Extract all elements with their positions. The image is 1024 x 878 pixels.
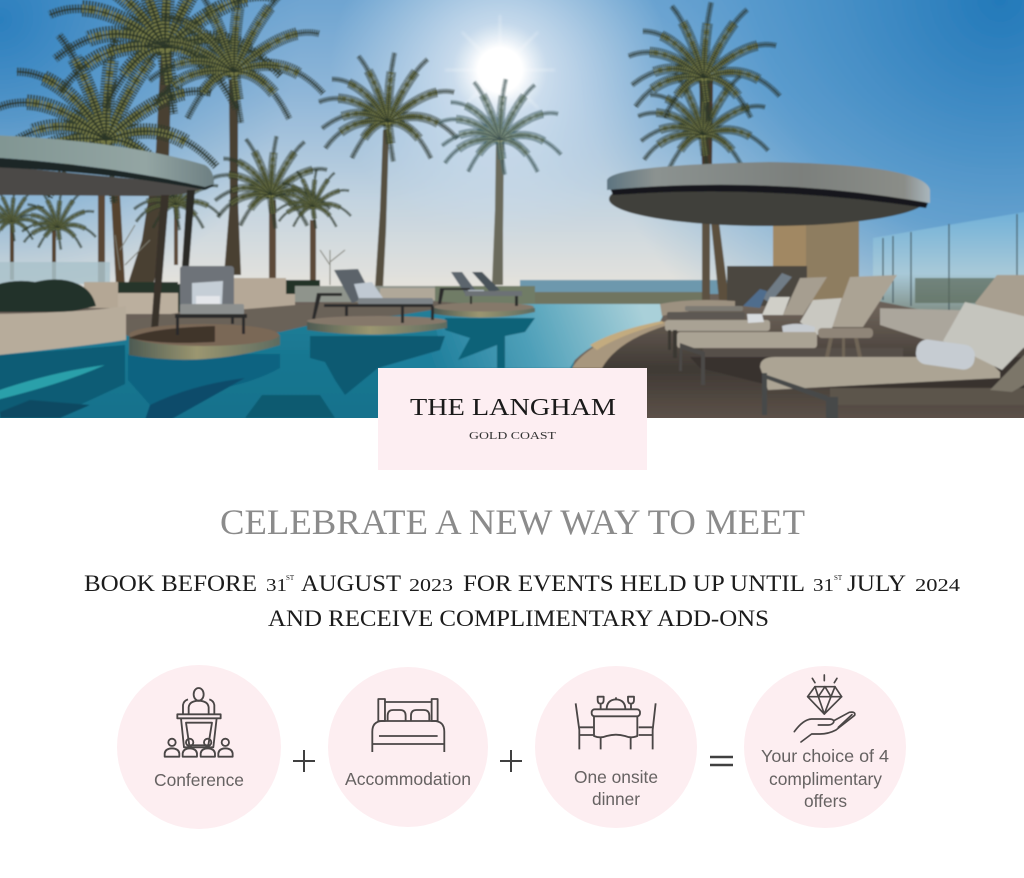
label: one onsite dinner: One onsite bbox=[574, 767, 658, 787]
lounger 1: foreground bbox=[760, 275, 1024, 420]
panel: accommodation bbox=[328, 667, 488, 827]
palm crowns bbox=[0, 0, 780, 250]
centre lounger bbox=[312, 269, 434, 323]
label: one onsite dinner: dinner bbox=[592, 789, 640, 809]
line two: AND RECEIVE COMPLIMENTARY ADD-ONS bbox=[268, 606, 769, 631]
sun flare bbox=[446, 16, 554, 106]
line one: ST bbox=[286, 574, 295, 582]
far loungers bbox=[438, 272, 522, 306]
rolled towel bbox=[914, 338, 976, 371]
logo panel bbox=[378, 368, 647, 470]
logo: gold coast: GOLD COAST bbox=[469, 431, 557, 442]
side table bbox=[818, 328, 873, 357]
line one: 31 bbox=[266, 575, 287, 595]
label: complimentary offers: complimentary bbox=[769, 769, 882, 789]
label: one onsite dinner bbox=[574, 767, 658, 809]
right round canopy bbox=[607, 162, 930, 226]
icon: bed bbox=[372, 699, 444, 752]
round platforms bbox=[129, 302, 535, 360]
pool loungers bbox=[175, 266, 522, 335]
foreground cushion bbox=[943, 302, 1024, 370]
pool water bbox=[0, 304, 668, 420]
label: conference: Conference bbox=[154, 770, 244, 790]
booking offer text bbox=[84, 571, 960, 631]
icon: dining table bbox=[576, 697, 656, 749]
line one: ST bbox=[834, 574, 843, 582]
label: complimentary offers: Your choice of 4 bbox=[761, 746, 889, 766]
lounger 3 bbox=[665, 277, 827, 358]
plus sign bbox=[293, 750, 315, 772]
lounger 2 bbox=[677, 275, 903, 385]
left canopy bbox=[0, 135, 214, 330]
panel: onsite dinner bbox=[535, 666, 697, 828]
glass balustrade bbox=[873, 210, 1024, 348]
lounger 4: blue back bbox=[667, 273, 792, 319]
sun lounger row bbox=[665, 273, 1024, 420]
small far pool rim bbox=[660, 300, 735, 316]
label: complimentary offers: offers bbox=[804, 791, 847, 811]
label: accommodation: Accommodation bbox=[345, 769, 471, 789]
plus sign bbox=[500, 750, 522, 772]
armchair lounger bbox=[175, 266, 247, 335]
right timber deck bbox=[570, 306, 1024, 420]
line one: 31 bbox=[813, 575, 834, 595]
line one: FOR EVENTS HELD UP UNTIL bbox=[463, 571, 805, 596]
right canopy column bbox=[726, 220, 860, 306]
panel: conference bbox=[117, 665, 281, 829]
line one: 2024 bbox=[915, 575, 960, 595]
hero photo: resort pool with palms bbox=[0, 0, 1024, 420]
icon: diamond in hand bbox=[794, 675, 855, 742]
pale tree bbox=[115, 225, 345, 285]
line one: JULY bbox=[847, 571, 906, 596]
sky bbox=[0, 0, 1024, 290]
icon: lectern and audience bbox=[165, 688, 233, 757]
equals sign bbox=[710, 757, 733, 765]
line one bbox=[84, 571, 960, 596]
heading: CELEBRATE A NEW WAY TO MEET bbox=[220, 502, 805, 542]
line one: BOOK BEFORE bbox=[84, 571, 257, 596]
sea and dune bbox=[520, 280, 740, 304]
palm trunks bbox=[10, 50, 729, 300]
ground base bbox=[0, 293, 917, 366]
left pool deck bbox=[127, 300, 470, 336]
label: complimentary offers bbox=[761, 746, 889, 811]
left stone planter and shrubs bbox=[0, 279, 126, 356]
line one: AUGUST bbox=[301, 571, 401, 596]
panel: complimentary offers bbox=[744, 666, 906, 828]
back walls and planters bbox=[0, 262, 535, 314]
line one: 2023 bbox=[409, 575, 453, 595]
logo: the langham: THE LANGHAM bbox=[410, 395, 616, 421]
